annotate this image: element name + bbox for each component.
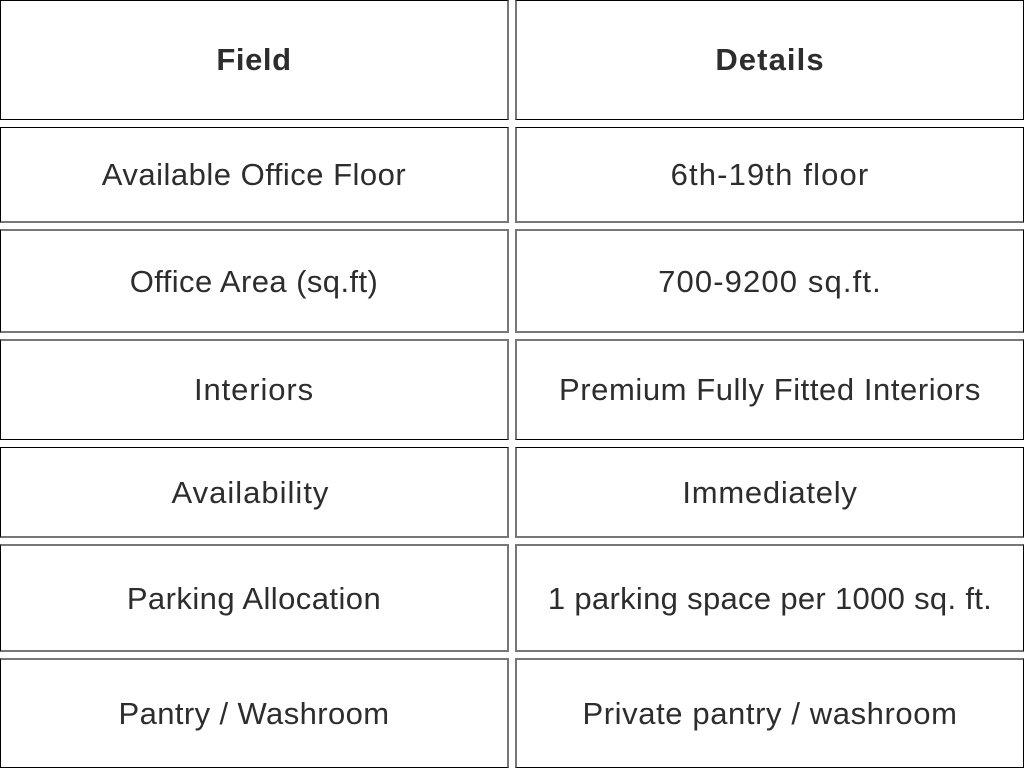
field: Available Office Floor (0, 127, 509, 223)
field: Office Area: Office Area (sq.ft) (130, 264, 378, 298)
value: area: 700-9200 sq.ft. (658, 264, 882, 298)
value: pantry (515, 658, 1024, 768)
value: interiors (515, 339, 1024, 440)
value: area (515, 229, 1024, 333)
header: Field: Field (216, 42, 292, 77)
field: Availability (0, 447, 509, 538)
field: Pantry / Washroom: Pantry / Washroom (119, 696, 389, 730)
value: parking (515, 544, 1024, 652)
field: Interiors (0, 339, 509, 440)
field: Office Area (0, 229, 509, 333)
value: pantry: Private pantry / washroom (582, 696, 958, 730)
value: availability (515, 447, 1024, 538)
header: Field (0, 0, 509, 120)
field: Pantry / Washroom (0, 658, 509, 768)
value: floors (515, 127, 1024, 223)
field: Interiors: Interiors (194, 372, 314, 407)
field: Availability: Availability (172, 474, 329, 510)
value: interiors: Premium Fully Fitted Interiors (559, 372, 981, 407)
value: parking: 1 parking space per 1000 sq. ft. (548, 580, 992, 616)
field: Parking Allocation: Parking Allocation (127, 580, 381, 616)
header: Details: Details (715, 42, 825, 77)
value: floors: 6th-19th floor (671, 156, 869, 192)
field: Parking Allocation (0, 544, 509, 652)
field: Available Office Floor: Available Office Floor (102, 156, 406, 192)
value: availability: Immediately (682, 474, 858, 510)
header: Details (515, 0, 1024, 120)
